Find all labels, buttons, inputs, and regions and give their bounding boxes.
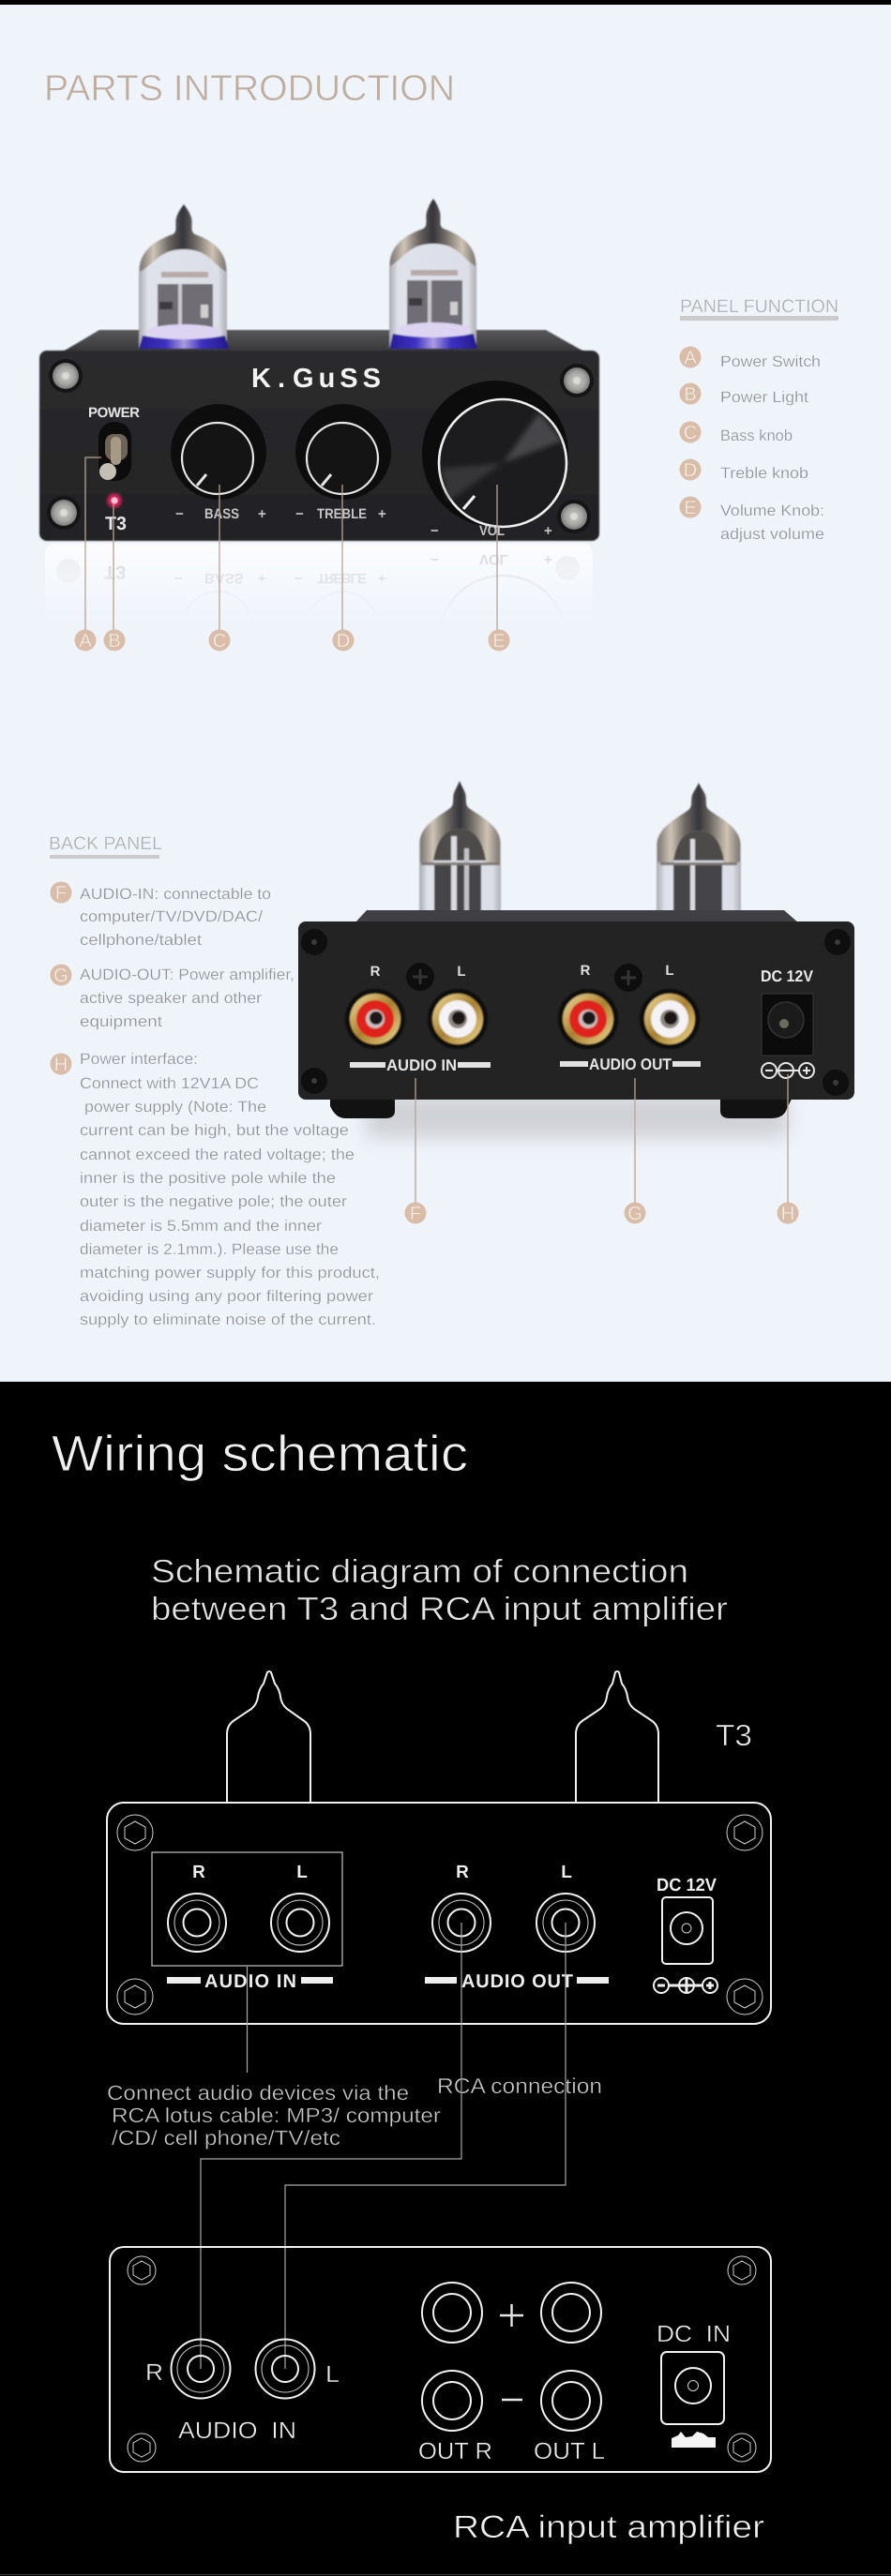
tube outline right [576, 1671, 658, 1803]
audio out label: AUDIO OUT [461, 1971, 573, 1992]
subtitle: schematic diagram: between T3 and RCA input amplifier [151, 1591, 728, 1627]
back panel item H: current can be high, but the voltage [80, 1122, 349, 1139]
bottom edge line [0, 2574, 891, 2575]
amp top plate [58, 330, 589, 354]
power switch [98, 422, 131, 481]
back panel item H: diameter is 5.5mm and the inner [80, 1218, 323, 1235]
knob scale labels: + [544, 523, 552, 539]
title: parts introduction: PARTS INTRODUCTION [44, 68, 455, 109]
vacuum tube left [139, 204, 229, 349]
panel reflection: TREBLE [317, 570, 367, 586]
page background: dark section [0, 1382, 891, 2576]
note: connect audio devices: /CD/ cell phone/TV/etc [112, 2126, 340, 2149]
T3 label: T3 [716, 1718, 752, 1752]
callout badges F to H [405, 1202, 799, 1224]
vacuum tube left back [419, 781, 501, 919]
callout badges F to H: G [627, 1204, 642, 1224]
back face [298, 921, 854, 1100]
knob scale labels: + [378, 506, 386, 522]
brand label: . [278, 364, 285, 394]
panel reflection: − [430, 551, 439, 567]
back panel item H: H [54, 1055, 68, 1075]
knob scale labels: BASS [204, 506, 239, 522]
RCA socket white in [428, 989, 488, 1049]
panel reflection: + [378, 570, 386, 586]
note: connect audio devices: RCA lotus cable: MP3/ computer [112, 2104, 441, 2127]
callout badges A to E: C [213, 631, 226, 651]
DC 12V label: DC 12V [761, 967, 814, 985]
amplifier enclosure [110, 2247, 771, 2472]
top black bar [0, 0, 891, 5]
knob scale labels: VOL [479, 523, 505, 539]
back shadow [366, 1095, 788, 1138]
panel function list: E [684, 498, 697, 518]
knob scale labels [175, 506, 552, 539]
back feet [330, 1097, 793, 1118]
back panel item G: active speaker and other [80, 990, 263, 1007]
corner screws [117, 1815, 763, 2014]
back panel item G: AUDIO-OUT: Power amplifier, [80, 966, 294, 983]
RCA sockets [168, 1894, 595, 1952]
back screws [301, 929, 851, 1096]
audio in label: AUDIO IN [386, 1056, 457, 1074]
output sockets [422, 2283, 601, 2431]
panel reflection: + [258, 570, 266, 586]
DC IN label: DC IN [657, 2321, 731, 2347]
back panel item H: outer is the negative pole; the outer [80, 1193, 348, 1210]
panel reflection: − [174, 570, 183, 586]
note: RCA connection: RCA connection [437, 2074, 602, 2098]
wire: right channel RCA connection [201, 1923, 461, 2369]
panel reflection: + [544, 551, 552, 567]
cross screws between sockets [406, 963, 642, 992]
panel reflection: − [294, 570, 303, 586]
callout badges A to E: E [492, 631, 506, 651]
callout badges A to E: B [108, 631, 121, 651]
back panel item F: F [55, 883, 67, 904]
back panel item G: G [53, 966, 68, 986]
schematic: RCA input amplifier [110, 2247, 771, 2472]
panel reflection: VOL [479, 551, 508, 567]
output labels [418, 2438, 605, 2464]
audio in label: AUDIO IN [178, 2418, 296, 2444]
wire: audio devices [246, 1967, 248, 2073]
polarity symbol [762, 1063, 814, 1078]
bass knob [171, 404, 266, 500]
title: wiring schematic: Wiring schematic [52, 1426, 468, 1482]
panel function list [679, 347, 824, 543]
DC jack [661, 2352, 724, 2424]
panel reflection [45, 544, 593, 591]
back panel item F: computer/TV/DVD/DAC/ [80, 908, 263, 925]
front panel screws [47, 359, 594, 533]
schematic: T3 device [107, 1671, 771, 2024]
power label: POWER [88, 405, 140, 421]
panel function list: Power Switch [720, 353, 821, 370]
RCA socket white out [640, 989, 700, 1049]
panel reflection: BASS [204, 570, 244, 586]
back panel item H [51, 1051, 380, 1328]
polarity symbol [654, 1978, 717, 1993]
panel function list: Power Light [720, 389, 808, 406]
channel letters: R [581, 963, 591, 979]
brand label [251, 364, 381, 394]
channel letters: L [561, 1863, 572, 1882]
R and L labels [145, 2359, 340, 2388]
model label T3: T3 [105, 514, 127, 534]
back panel item G: equipment [80, 1013, 162, 1030]
callout leaders A to E [85, 457, 497, 630]
panel reflection: T3 [104, 562, 126, 582]
callout badges F to H: F [410, 1204, 421, 1224]
back panel item G [51, 964, 294, 1030]
knob scale labels: − [175, 506, 184, 522]
back panel item H: inner is the positive pole while the [80, 1170, 336, 1187]
knob scale labels: + [258, 506, 266, 522]
channel letters: R [370, 964, 381, 980]
back panel item H: diameter is 2.1mm.). Please use the [80, 1241, 339, 1258]
channel letters: R [192, 1863, 205, 1882]
panel function list: C [684, 423, 697, 443]
channel letters: L [296, 1863, 308, 1882]
plus and minus signs [500, 2304, 523, 2400]
back panel item F: AUDIO-IN: connectable to [80, 886, 271, 903]
RCA socket red out [558, 989, 618, 1049]
back panel item H: Power interface: [80, 1051, 198, 1068]
channel letters: L [457, 964, 466, 980]
knob scale labels: − [430, 523, 439, 539]
audio in label: AUDIO IN [204, 1971, 296, 1992]
panel function list: adjust volume [720, 526, 824, 543]
RCA socket red in [345, 989, 405, 1049]
channel letters: L [665, 963, 674, 979]
product photo: front panel [39, 199, 599, 541]
T3 enclosure [107, 1803, 771, 2024]
wire: left channel RCA connection [285, 1923, 566, 2369]
label: RCA input amplifier: RCA input amplifier [453, 2509, 764, 2545]
callout badges A to E [75, 630, 510, 651]
back top plate [355, 910, 799, 923]
treble knob [295, 404, 391, 500]
panel function list: D [684, 460, 697, 481]
product photo: back panel [298, 781, 854, 1138]
back panel item H: matching power supply for this product, [80, 1265, 380, 1281]
DC jack [762, 994, 813, 1056]
audio-in highlight box [152, 1852, 342, 1966]
subtitle: schematic diagram [151, 1553, 728, 1627]
audio in sockets [171, 2340, 315, 2398]
back panel item H: Connect with 12V1A DC [80, 1075, 259, 1092]
output labels: OUT R [418, 2438, 492, 2464]
power LED [105, 491, 124, 510]
panel function list: Bass knob [720, 427, 793, 444]
note: connect audio devices [107, 2081, 441, 2149]
page background: light section [0, 0, 891, 1382]
panel function list: A [684, 348, 697, 368]
amp front face [39, 351, 599, 541]
callout leaders F to H [415, 1074, 788, 1203]
DC polarity mark [672, 2432, 716, 2448]
volume knob [422, 381, 568, 527]
channel letters [192, 1863, 572, 1882]
callout badges A to E: D [337, 631, 350, 651]
channel letters [370, 963, 674, 980]
R and L labels: R [145, 2359, 163, 2386]
brand label: GuSS [293, 364, 381, 394]
heading: panel function: PANEL FUNCTION [680, 296, 838, 317]
back panel item H: cannot exceed the rated voltage; the [80, 1146, 355, 1163]
corner screws [128, 2256, 756, 2462]
audio in label [350, 1056, 491, 1074]
output labels: OUT L [534, 2438, 605, 2464]
knob scale labels: TREBLE [317, 506, 367, 522]
DC 12V label: DC 12V [657, 1876, 717, 1895]
back panel item H: avoiding using any poor filtering power [80, 1288, 374, 1305]
panel function list: Volume Knob: [720, 502, 824, 519]
vacuum tube right back [657, 783, 741, 919]
knob scale labels: − [295, 506, 304, 522]
callout badges A to E: A [79, 631, 92, 651]
brand label: K [251, 364, 271, 394]
panel function list: Treble knob [720, 465, 808, 482]
audio out label: AUDIO OUT [589, 1056, 672, 1073]
audio in label [167, 1971, 333, 1992]
R and L labels: L [325, 2361, 340, 2388]
heading: back panel: BACK PANEL [49, 833, 162, 854]
vacuum tube right [389, 199, 477, 349]
panel function list: B [684, 384, 697, 405]
audio out label [425, 1971, 609, 1992]
tube outline left [227, 1671, 310, 1803]
back panel item H: power supply (Note: The [84, 1099, 266, 1116]
callout badges F to H: H [781, 1204, 794, 1224]
note: connect audio devices: Connect audio devices via the [107, 2081, 409, 2104]
back panel item F [51, 881, 271, 949]
subtitle: schematic diagram: Schematic diagram of connection [151, 1553, 688, 1590]
audio out label [560, 1056, 701, 1073]
back panel item H: supply to eliminate noise of the current. [80, 1311, 376, 1328]
back panel item F: cellphone/tablet [80, 932, 202, 949]
DC jack [662, 1897, 713, 1964]
channel letters: R [456, 1863, 469, 1882]
